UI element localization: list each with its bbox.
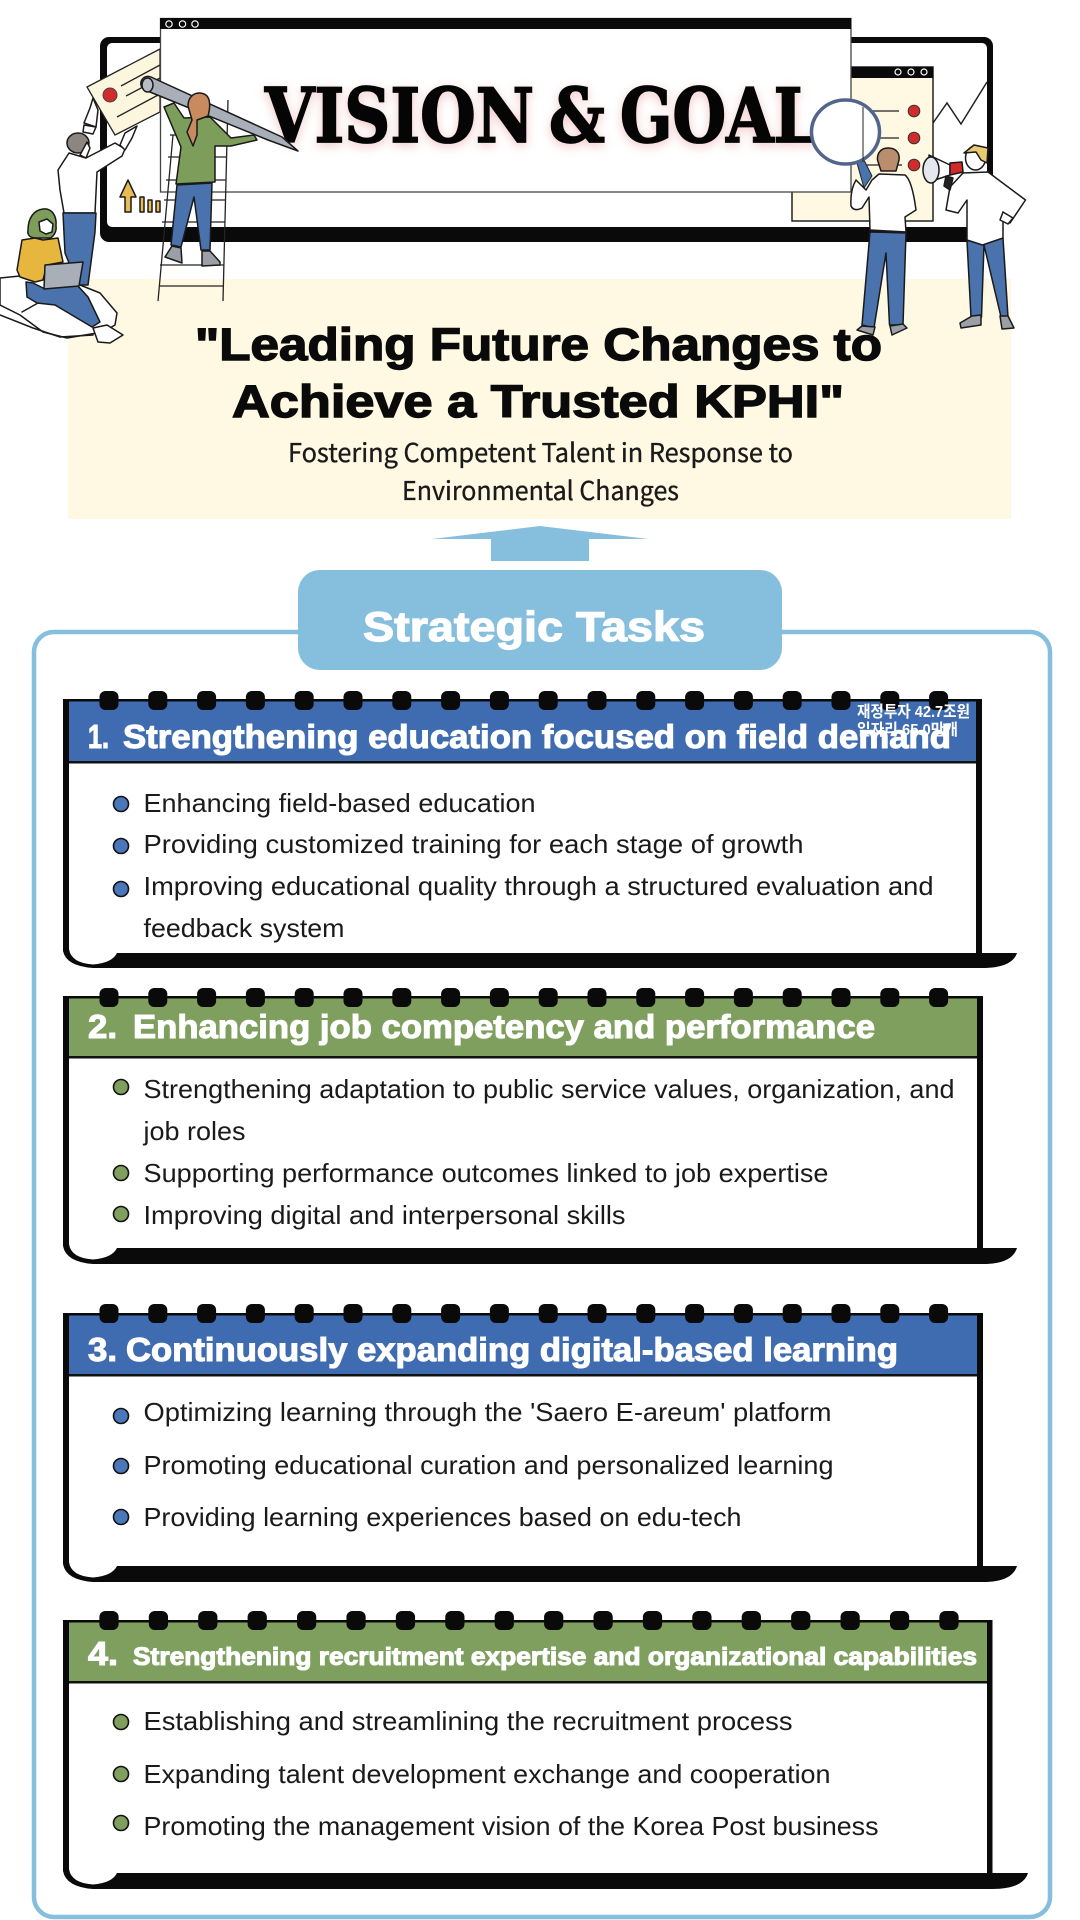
- task 1 title: Strengthening education focused on field demand: [123, 718, 951, 755]
- overlay note: 일자리 65.0만개: [857, 721, 958, 739]
- task 2 number: 2.: [88, 1008, 117, 1045]
- icon: woman on ladder with pencil: [141, 76, 298, 266]
- spiral rings: [100, 691, 948, 710]
- heading: vision statement: "Leading Future Changes to: [195, 319, 882, 370]
- task 2 list: Supporting performance outcomes linked to job expertise: [144, 1158, 828, 1188]
- heading: strategic tasks: Strategic Tasks: [363, 603, 705, 650]
- panel: task 2: [63, 988, 1017, 1264]
- task 2 list: job roles: [142, 1116, 246, 1146]
- title: GOAL: [620, 72, 817, 160]
- task 4 list: [114, 1706, 878, 1841]
- icon: man with megaphone: [923, 145, 1026, 329]
- text block: vision subtitle: Fostering Competent Talent in Response to: [288, 433, 793, 470]
- spiral rings: [100, 1304, 948, 1323]
- overlay note: [857, 703, 970, 739]
- task 3 number: 3.: [88, 1331, 117, 1368]
- icon: certificate document: [87, 49, 160, 135]
- panel: title window: [160, 18, 851, 192]
- title: VISION: [264, 72, 534, 160]
- task 2 list: [114, 1074, 954, 1230]
- title: [264, 72, 817, 160]
- icon: man from behind with magnifier: [851, 148, 916, 335]
- task 4 number: 4.: [88, 1635, 118, 1672]
- heading: strategic tasks: [298, 570, 782, 670]
- heading: vision statement: [195, 319, 882, 427]
- panel: monitor frame: [100, 37, 993, 242]
- panel: small checklist window: [792, 67, 933, 221]
- task 1 list: feedback system: [144, 913, 344, 943]
- task 3 list: Optimizing learning through the 'Saero E-areum' platform: [144, 1397, 832, 1427]
- task 3 list: Providing learning experiences based on edu-tech: [144, 1502, 742, 1532]
- task 4 title: Strengthening recruitment expertise and organizational capabilities: [133, 1643, 977, 1671]
- heading: vision statement: Achieve a Trusted KPHI": [232, 376, 844, 427]
- task 1 list: Providing customized training for each stage of growth: [144, 829, 804, 859]
- task 3 list: [114, 1397, 833, 1532]
- task 1 list: Improving educational quality through a structured evaluation and: [144, 871, 933, 901]
- task 2 list: Strengthening adaptation to public service values, organization, and: [144, 1074, 954, 1104]
- spiral rings: [100, 988, 948, 1007]
- task 1 number: 1.: [88, 718, 109, 755]
- icon: magnifying glass: [812, 100, 880, 188]
- text block: vision subtitle: Environmental Changes: [402, 471, 679, 508]
- task 3 title: Continuously expanding digital-based learning: [126, 1331, 898, 1368]
- task 2 title: Enhancing job competency and performance: [133, 1008, 875, 1045]
- task 4 list: Promoting the management vision of the Korea Post business: [144, 1811, 878, 1841]
- title: &: [549, 72, 605, 160]
- panel: task 1: [63, 691, 1017, 968]
- icon: man lifting document: [58, 98, 137, 285]
- panel: vision statement background: [68, 279, 1011, 519]
- panel: task 3: [63, 1304, 1017, 1582]
- icon: woman with laptop on cushion: [0, 209, 123, 343]
- task 3 list: Promoting educational curation and personalized learning: [144, 1450, 833, 1480]
- icon: ladder: [158, 100, 228, 301]
- task 1 list: [114, 788, 933, 943]
- chart: zigzag line: [933, 82, 987, 124]
- panel: strategic tasks border: [34, 632, 1050, 1917]
- icon: growth arrow and bars: [120, 180, 160, 212]
- panel: task 4: [63, 1611, 1028, 1889]
- task 1 list: Enhancing field-based education: [144, 788, 536, 818]
- spiral rings: [99, 1611, 959, 1630]
- task 4 list: Expanding talent development exchange and cooperation: [144, 1759, 830, 1789]
- task 4 list: Establishing and streamlining the recruitment process: [144, 1706, 792, 1736]
- overlay note: 재정투자 42.7조원: [857, 703, 970, 721]
- arrow: upward: [432, 526, 648, 561]
- text block: vision subtitle: [288, 433, 793, 508]
- task 2 list: Improving digital and interpersonal skills: [144, 1200, 626, 1230]
